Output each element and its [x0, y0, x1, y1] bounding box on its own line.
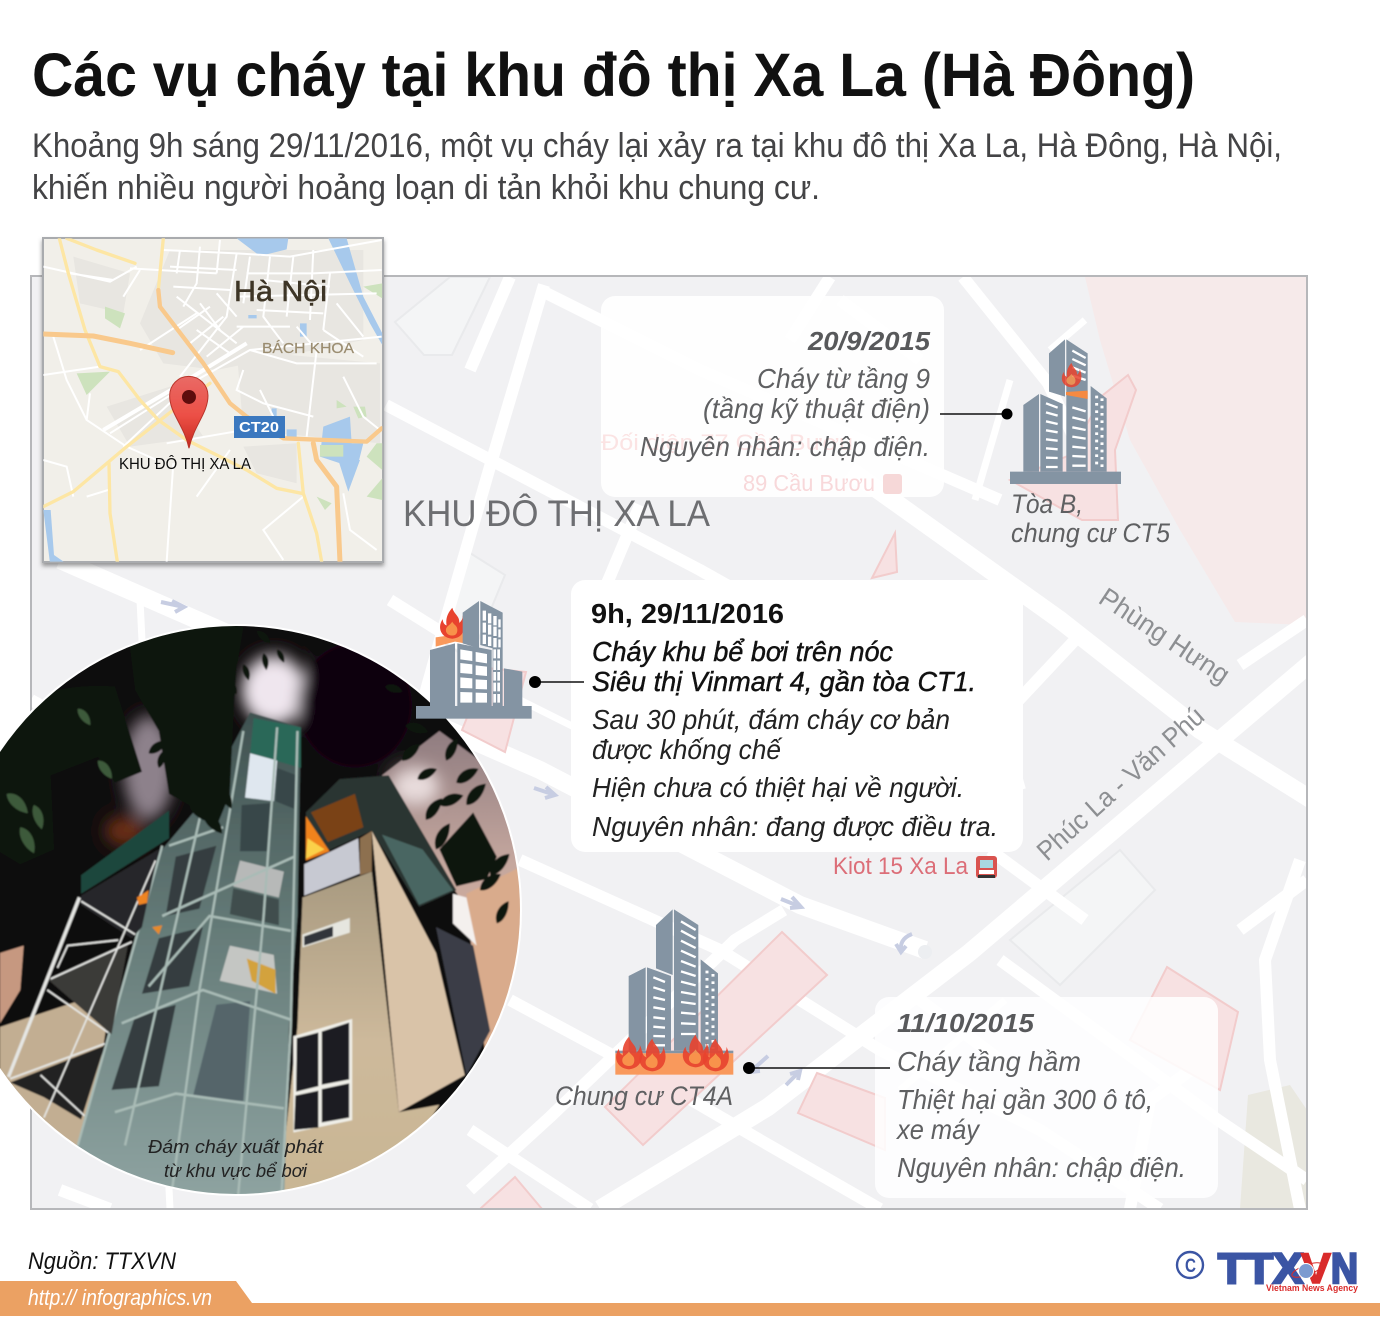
headline	[592, 636, 976, 697]
icon: building CT5 on fire	[1010, 339, 1121, 484]
description: Cháy từ tầng 9	[757, 363, 930, 394]
panel: street map of Xa La	[31, 276, 1320, 1209]
panel: fire 20/9/2015	[601, 296, 944, 497]
logo: TTXVN: TTX	[1218, 1245, 1303, 1293]
details	[592, 704, 998, 842]
details: Sau 30 phút, đám cháy cơ bản	[592, 704, 950, 735]
description: Cháy tầng hầm	[897, 1046, 1081, 1077]
label: Bách Khoa: BÁCH KHOA	[262, 340, 354, 357]
icon: map pin	[170, 376, 208, 448]
details: Nguyên nhân: đang được điều tra.	[592, 811, 998, 842]
connector: CT5	[940, 408, 1012, 420]
logo: TTXVN: Vietnam News Agency	[1266, 1283, 1358, 1293]
connector: CT4A	[743, 1062, 890, 1074]
photo caption: từ khu vực bể bơi	[164, 1160, 308, 1181]
description: xe máy	[895, 1114, 981, 1145]
source note: Nguồn: TTXVN	[28, 1248, 177, 1275]
logo: TTXVN: V	[1301, 1245, 1331, 1293]
map label: Phùng Hưng: Phùng Hưng	[1094, 582, 1235, 690]
title: Các vụ cháy tại khu đô thị Xa La (Hà Đông)	[32, 41, 1195, 109]
map label: Đối diện 77 Cầu Bươu: Đối diện 77 Cầu Bươu	[601, 430, 853, 455]
description: Thiệt hại gần 300 ô tô,	[897, 1084, 1153, 1115]
copyright mark: C	[1185, 1256, 1196, 1277]
logo: TTXVN	[1177, 1245, 1358, 1293]
copyright mark	[1177, 1252, 1203, 1278]
map label: 89 Cầu Bươu: 89 Cầu Bươu	[743, 470, 875, 496]
description: Nguyên nhân: chập điện.	[897, 1152, 1186, 1183]
map arrows	[161, 601, 912, 1085]
windows	[293, 1019, 352, 1132]
map heading: KHU ĐÔ THỊ XA LA: KHU ĐÔ THỊ XA LA	[403, 493, 710, 534]
label: Chung cư CT4A: Chung cư CT4A	[555, 1081, 733, 1111]
description: (tầng kỹ thuật điện)	[703, 393, 930, 424]
icon: building Vinmart 4 on fire	[416, 601, 532, 719]
photo: burning building	[0, 624, 522, 1196]
logo: TTXVN: N	[1331, 1245, 1358, 1293]
panel: fire 11/10/2015	[875, 997, 1218, 1198]
label: Tòa B, chung cư CT5: chung cư CT5	[1011, 518, 1171, 548]
headline: Siêu thị Vinmart 4, gần tòa CT1.	[592, 666, 976, 697]
details: được khống chế	[592, 734, 783, 765]
inset map: Hanoi	[43, 238, 383, 563]
foliage	[0, 624, 497, 886]
description	[640, 363, 930, 462]
headline: Cháy khu bể bơi trên nóc	[592, 636, 893, 667]
label: Tòa B, chung cư CT5: Tòa B,	[1011, 489, 1083, 519]
label: Tòa B, chung cư CT5	[1011, 489, 1171, 548]
building front	[277, 872, 439, 1212]
badge: CT20: CT20	[239, 419, 279, 436]
description: Nguyên nhân: chập điện.	[640, 431, 930, 462]
date: 20/9/2015	[807, 326, 931, 356]
glass elevator shaft	[61, 712, 301, 1212]
date: 9h, 29/11/2016	[591, 598, 784, 629]
badge: CT20	[234, 416, 285, 438]
details: Hiện chưa có thiệt hại về người.	[592, 772, 964, 803]
connector: Vinmart 4	[529, 676, 584, 688]
icon: building CT4A on fire	[615, 909, 733, 1075]
footer bar	[0, 1281, 1380, 1316]
photo caption	[148, 1136, 324, 1181]
intro text: khiến nhiều người hoảng loạn di tản khỏi khu chung cư.	[32, 169, 820, 207]
website: http:// infographics.vn	[28, 1285, 212, 1310]
photo caption: Đám cháy xuất phát	[148, 1136, 324, 1157]
panel: fire 9h 29/11/2016	[571, 580, 1023, 852]
label: Hà Nội: Hà Nội	[234, 276, 327, 308]
map label: Kiot 15 Xa La with bus icon: Kiot 15 Xa La	[833, 853, 969, 880]
intro text: Khoảng 9h sáng 29/11/2016, một vụ cháy lại xảy ra tại khu đô thị Xa La, Hà Đông, Hà Nội,	[32, 127, 1282, 165]
date: 11/10/2015	[897, 1008, 1035, 1038]
label: Khu đô thị Xa La: KHU ĐÔ THỊ XA LA	[119, 456, 252, 473]
map label: Phúc La - Văn Phú: Phúc La - Văn Phú	[1031, 701, 1210, 866]
intro text	[32, 127, 1282, 207]
scaffold	[81, 811, 169, 894]
description	[895, 1046, 1186, 1183]
